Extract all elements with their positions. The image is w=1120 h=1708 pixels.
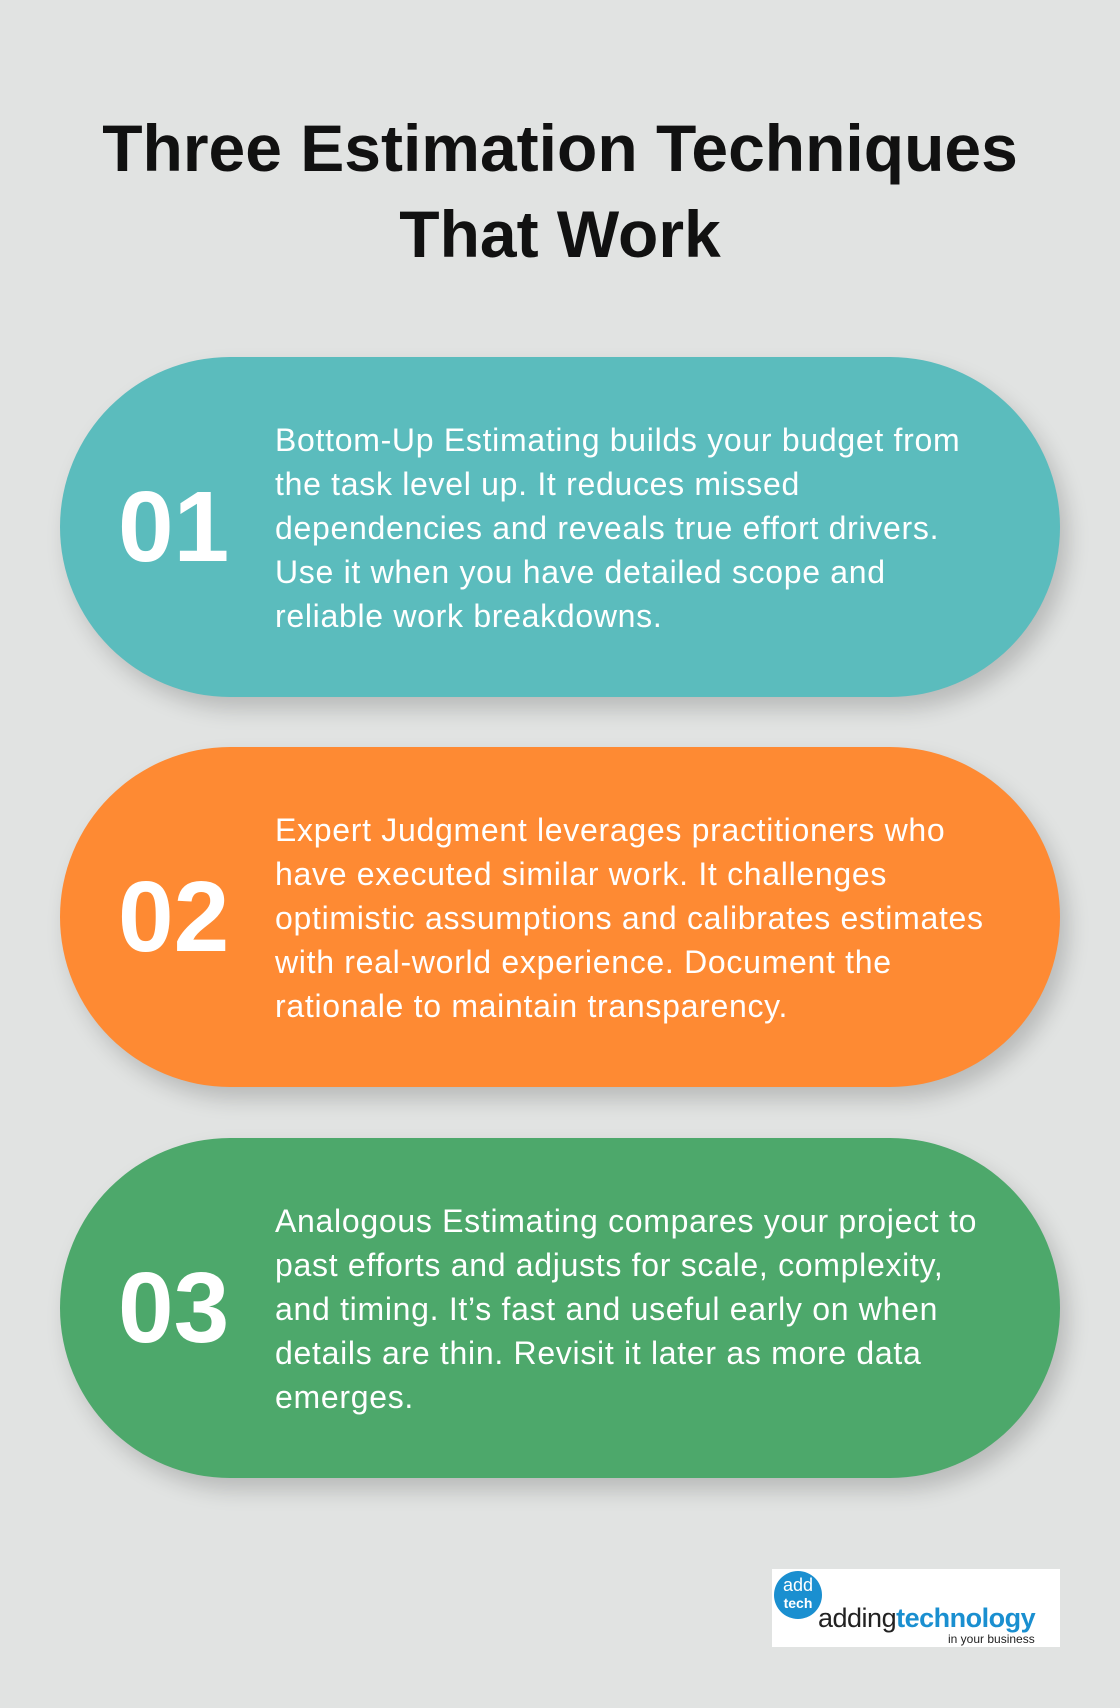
- text: analogous: [275, 1203, 977, 1415]
- title: Three Estimation Techniques: [102, 111, 1018, 185]
- number 03: 03: [118, 1252, 229, 1364]
- text: expert judgment: [275, 812, 984, 1024]
- text: analogous: details are thin. Revisit it later as more data: [275, 1335, 922, 1371]
- title: That Work: [399, 197, 721, 271]
- text: expert judgment: have executed similar work. It challenges: [275, 856, 887, 892]
- title: [102, 111, 1018, 271]
- number 01: 01: [118, 471, 229, 583]
- text: analogous: past efforts and adjusts for scale, complexity,: [275, 1247, 943, 1283]
- logo icon: add: [783, 1575, 813, 1595]
- logo: [772, 1569, 1060, 1647]
- text: bottom-up: reliable work breakdowns.: [275, 598, 662, 634]
- logo icon: [774, 1571, 822, 1619]
- panel: analogous: [60, 1138, 1060, 1478]
- text: bottom-up: the task level up. It reduces missed: [275, 466, 800, 502]
- text: bottom-up: Use it when you have detailed scope and: [275, 554, 886, 590]
- logo icon: tech: [784, 1595, 812, 1611]
- logo text: addingtechnology: [818, 1603, 1035, 1633]
- text: expert judgment: optimistic assumptions and calibrates estimates: [275, 900, 984, 936]
- logo: in your business: [948, 1632, 1035, 1646]
- text: expert judgment: rationale to maintain transparency.: [275, 988, 788, 1024]
- text: bottom-up: dependencies and reveals true effort drivers.: [275, 510, 939, 546]
- text: bottom-up: [275, 422, 960, 634]
- number 02: 02: [118, 861, 229, 973]
- panel: bottom-up: [60, 357, 1060, 697]
- text: analogous: Analogous Estimating compares your project to: [275, 1203, 977, 1239]
- text: analogous: and timing. It’s fast and useful early on when: [275, 1291, 938, 1327]
- text: expert judgment: Expert Judgment leverages practitioners who: [275, 812, 945, 848]
- text: bottom-up: Bottom-Up Estimating builds your budget from: [275, 422, 960, 458]
- panel: expert judgment: [60, 747, 1060, 1087]
- text: analogous: emerges.: [275, 1379, 414, 1415]
- text: expert judgment: with real-world experience. Document the: [275, 944, 892, 980]
